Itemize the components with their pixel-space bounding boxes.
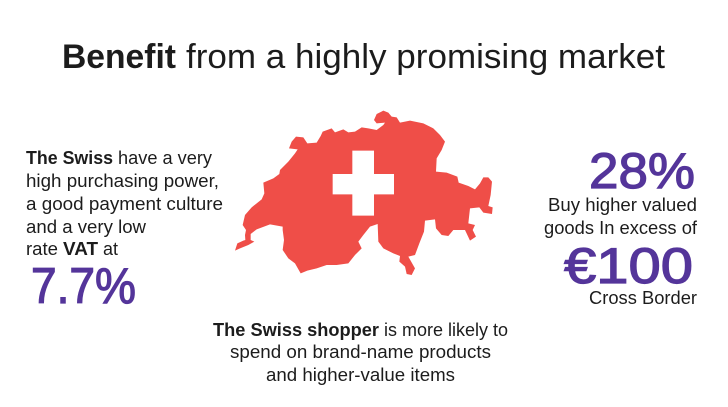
text block: Swiss shopper: The Swiss shopper bbox=[213, 320, 379, 340]
text block: Swiss purchasing power: and a very low bbox=[26, 217, 147, 237]
text block: Swiss shopper: is more likely to bbox=[384, 320, 508, 340]
title: from a highly promising market bbox=[186, 38, 666, 76]
text block: Swiss purchasing power bbox=[26, 148, 223, 259]
text block: Swiss shopper: and higher-value items bbox=[266, 365, 455, 385]
text block: Swiss purchasing power: The Swiss bbox=[26, 148, 113, 168]
text block: Swiss purchasing power: high purchasing power, bbox=[26, 171, 219, 191]
text block: Swiss purchasing power: rate bbox=[26, 239, 58, 259]
text block: higher valued goods: Buy higher valued bbox=[548, 195, 697, 215]
text block: Swiss shopper bbox=[213, 320, 508, 385]
title: Benefit bbox=[62, 38, 176, 76]
statistic: 7.7% VAT: 7.7% bbox=[31, 258, 136, 314]
text block: higher valued goods bbox=[544, 195, 698, 238]
text block: Swiss purchasing power: a good payment culture bbox=[26, 194, 223, 214]
text block: higher valued goods: goods In excess of bbox=[544, 218, 698, 238]
icon: map of Switzerland with white cross bbox=[235, 111, 493, 275]
text block: Swiss purchasing power: at bbox=[103, 239, 118, 259]
text: cross border: Cross Border bbox=[589, 288, 697, 308]
statistic: 28%: 28% bbox=[589, 143, 695, 199]
text block: Swiss purchasing power: VAT bbox=[63, 239, 98, 259]
statistic: €100: €100 bbox=[564, 238, 693, 294]
text block: Swiss purchasing power: have a very bbox=[118, 148, 212, 168]
text block: Swiss shopper: spend on brand-name products bbox=[230, 342, 491, 362]
